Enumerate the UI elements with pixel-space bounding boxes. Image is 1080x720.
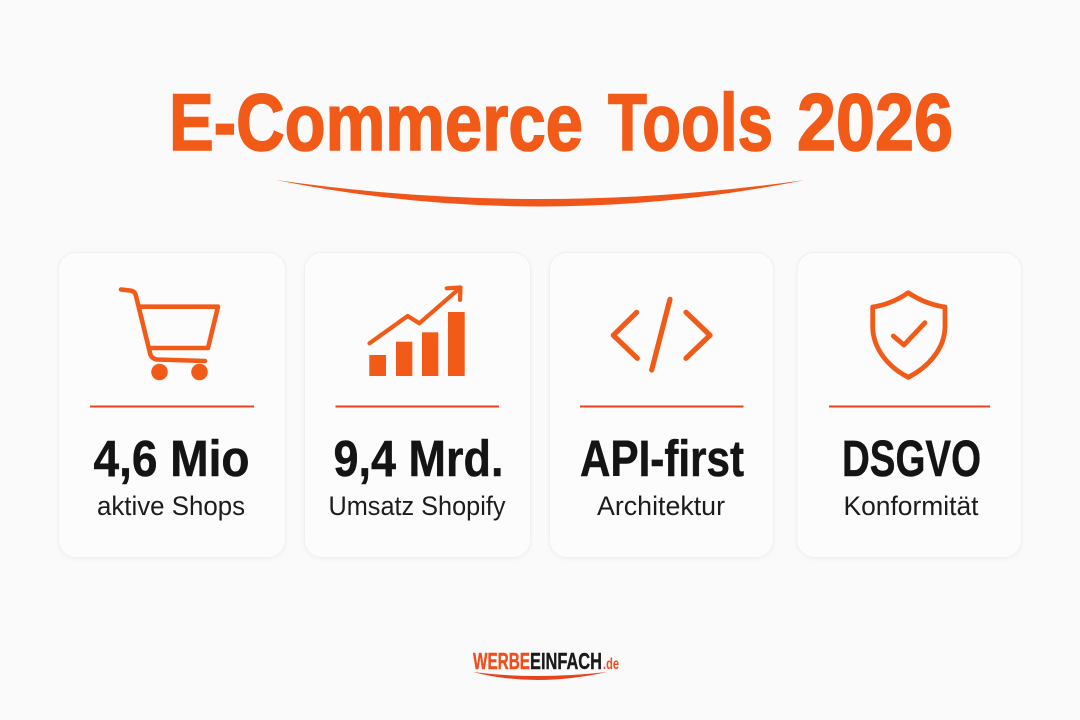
stat value: DSGVO — [842, 430, 981, 487]
stat label: Umsatz Shopify — [328, 491, 506, 521]
logo: WERBEEINFACH.de: WERBE — [473, 648, 530, 674]
title — [169, 78, 953, 168]
panel: Konformität — [797, 252, 1022, 558]
logo: WERBEEINFACH.de — [473, 648, 619, 680]
title: 2026 — [797, 78, 953, 168]
logo: WERBEEINFACH.de: EINFACH — [530, 648, 602, 674]
stat value: API-first — [580, 430, 744, 487]
panel: aktive Shops — [58, 252, 286, 558]
stat value: 9,4 Mrd. — [334, 430, 504, 487]
stat value: 4,6 Mio — [94, 430, 250, 487]
icon: shield with check — [873, 293, 945, 377]
stat label: Architektur — [597, 491, 725, 521]
panel: Architektur — [550, 252, 774, 558]
stat label: Konformität — [844, 491, 979, 521]
title: E-Commerce — [169, 78, 583, 168]
icon: code brackets — [613, 299, 710, 370]
logo: WERBEEINFACH.de: .de — [603, 656, 619, 673]
icon: rising bar chart — [369, 288, 465, 376]
title underline swoosh — [276, 180, 805, 206]
panel: Umsatz Shopify — [304, 252, 530, 558]
icon: shopping cart — [121, 290, 218, 380]
title: Tools — [608, 78, 773, 168]
stat label: aktive Shops — [97, 491, 245, 521]
